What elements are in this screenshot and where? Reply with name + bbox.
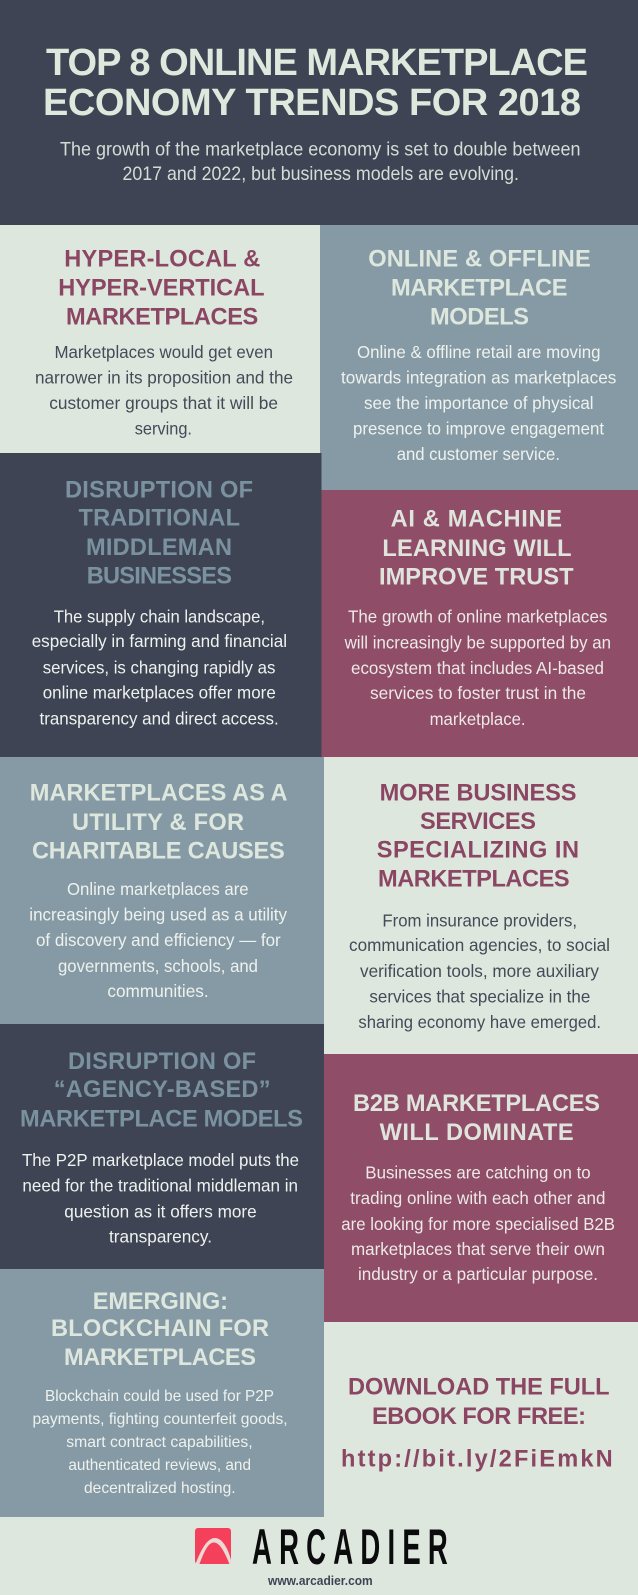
body text: customer groups that it will be: [49, 393, 278, 413]
heading: MARKETPLACE: [391, 276, 568, 302]
body text: serving.: [135, 418, 192, 438]
body text: verification tools, more auxiliary: [360, 961, 599, 981]
body text: governments, schools, and: [58, 956, 258, 976]
heading: EMERGING:: [93, 1289, 228, 1315]
body text: [22, 1150, 299, 1246]
body text: Marketplaces would get even: [54, 342, 273, 362]
body text: presence to improve engagement: [353, 418, 604, 438]
body text: of discovery and efficiency — for: [36, 930, 281, 950]
heading: LEARNING WILL: [382, 536, 572, 562]
website url: www.arcadier.com: [267, 1574, 373, 1588]
heading: AI & MACHINE: [391, 507, 562, 533]
heading: HYPER-VERTICAL: [58, 276, 265, 302]
body text: Online & offline retail are moving: [357, 342, 600, 362]
heading: EBOOK FOR FREE:: [372, 1404, 586, 1430]
body text: especially in farming and financial: [32, 631, 287, 651]
heading: DISRUPTION OF: [68, 1049, 256, 1075]
body text: transparency and direct access.: [40, 708, 279, 728]
body text: [341, 342, 617, 464]
body text: The supply chain landscape,: [54, 606, 265, 626]
heading: [348, 1375, 610, 1430]
body text: payments, fighting counterfeit goods,: [32, 1411, 288, 1428]
body text: The P2P marketplace model puts the: [22, 1150, 299, 1170]
heading: HYPER-LOCAL &: [64, 247, 260, 273]
body text: The growth of online marketplaces: [348, 606, 608, 626]
body text: services, is changing rapidly as: [43, 657, 276, 677]
body text: trading online with each other and: [350, 1188, 605, 1208]
body text: increasingly being used as a utility: [29, 905, 287, 925]
heading: [58, 247, 265, 331]
body text: narrower in its proposition and the: [35, 367, 293, 387]
body text: online marketplaces offer more: [43, 682, 276, 702]
heading: MIDDLEMAN: [86, 535, 232, 561]
subtitle: 2017 and 2022, but business models are evolving.: [122, 163, 519, 185]
body text: ecosystem that includes AI-based: [351, 658, 604, 678]
panel: hyper-local: [0, 225, 320, 453]
body text: [35, 342, 293, 438]
panel: utility and charitable: [0, 757, 324, 1024]
body text: services that specialize in the: [369, 986, 590, 1006]
panel: blockchain: [0, 1269, 324, 1517]
heading: BUSINESSES: [87, 563, 232, 589]
heading: “AGENCY-BASED”: [54, 1077, 271, 1103]
heading: ONLINE & OFFLINE: [368, 247, 591, 273]
heading: DISRUPTION OF: [65, 477, 253, 503]
heading: IMPROVE TRUST: [379, 564, 574, 590]
body text: transparency.: [109, 1226, 212, 1246]
panel: B2B: [324, 1054, 638, 1322]
heading: MORE BUSINESS: [380, 780, 576, 806]
body text: [29, 879, 287, 1001]
body text: decentralized hosting.: [84, 1480, 236, 1497]
heading: MARKETPLACES: [378, 867, 570, 893]
body text: are looking for more specialised B2B: [341, 1214, 615, 1234]
body text: question as it offers more: [64, 1202, 257, 1222]
heading: B2B MARKETPLACES: [353, 1091, 600, 1117]
body text: Blockchain could be used for P2P: [45, 1388, 274, 1405]
body text: Online marketplaces are: [67, 879, 249, 899]
heading: [368, 247, 591, 331]
heading: [30, 780, 288, 865]
body text: sharing economy have emerged.: [358, 1012, 601, 1032]
brand name: ARCADIER: [252, 1518, 448, 1575]
body text: communication agencies, to social: [349, 935, 610, 955]
body text: Businesses are catching on to: [365, 1163, 591, 1183]
heading: [20, 1049, 303, 1132]
header panel: [0, 0, 638, 225]
heading: DOWNLOAD THE FULL: [348, 1375, 610, 1401]
heading: [353, 1091, 600, 1146]
heading: UTILITY & FOR: [72, 810, 244, 836]
body text: will increasingly be supported by an: [344, 632, 611, 652]
heading: SPECIALIZING IN: [377, 838, 579, 864]
panel: AI and machine learning: [322, 490, 638, 757]
body text: services to foster trust in the: [370, 683, 586, 703]
heading: [379, 507, 574, 590]
panel: agency-based: [0, 1024, 324, 1269]
heading: BLOCKCHAIN FOR: [51, 1316, 269, 1342]
body text: smart contract capabilities,: [66, 1434, 253, 1451]
heading: WILL DOMINATE: [380, 1120, 574, 1146]
body text: marketplaces that serve their own: [351, 1239, 605, 1259]
heading: MODELS: [430, 305, 529, 331]
subtitle: [60, 138, 580, 185]
subtitle: The growth of the marketplace economy is set to double between: [60, 138, 580, 160]
body text: authenticated reviews, and: [68, 1457, 251, 1474]
body text: communities.: [107, 981, 209, 1001]
body text: [349, 910, 610, 1032]
icon: arcadier logo mark: [195, 1528, 231, 1564]
heading: MARKETPLACES: [64, 1345, 256, 1371]
heading: MARKETPLACES AS A: [30, 780, 288, 806]
panel: online and offline: [320, 225, 638, 490]
panel: business services: [324, 757, 638, 1054]
body text: [344, 606, 611, 729]
heading: [65, 477, 253, 589]
heading: MARKETPLACES: [66, 305, 258, 331]
heading: CHARITABLE CAUSES: [32, 839, 285, 865]
panel: download call to action: [324, 1322, 638, 1517]
title: ECONOMY TRENDS FOR 2018: [43, 82, 581, 124]
body text: see the importance of physical: [364, 393, 594, 413]
body text: industry or a particular purpose.: [358, 1264, 598, 1284]
heading: TRADITIONAL: [78, 506, 240, 532]
body text: [341, 1163, 615, 1284]
body text: marketplace.: [430, 709, 526, 729]
body text: and customer service.: [397, 444, 560, 464]
body text: [32, 606, 287, 728]
body text: towards integration as marketplaces: [341, 367, 617, 387]
title: [43, 42, 588, 124]
panel: disruption of middleman: [0, 453, 322, 757]
heading: [377, 780, 579, 893]
download link: http://bit.ly/2FiEmkN: [341, 1447, 613, 1473]
heading: MARKETPLACE MODELS: [20, 1106, 303, 1132]
body text: From insurance providers,: [382, 910, 577, 930]
heading: SERVICES: [420, 809, 536, 835]
body text: [32, 1388, 288, 1497]
body text: need for the traditional middleman in: [22, 1176, 298, 1196]
heading: [51, 1289, 269, 1371]
title: TOP 8 ONLINE MARKETPLACE: [46, 42, 588, 84]
